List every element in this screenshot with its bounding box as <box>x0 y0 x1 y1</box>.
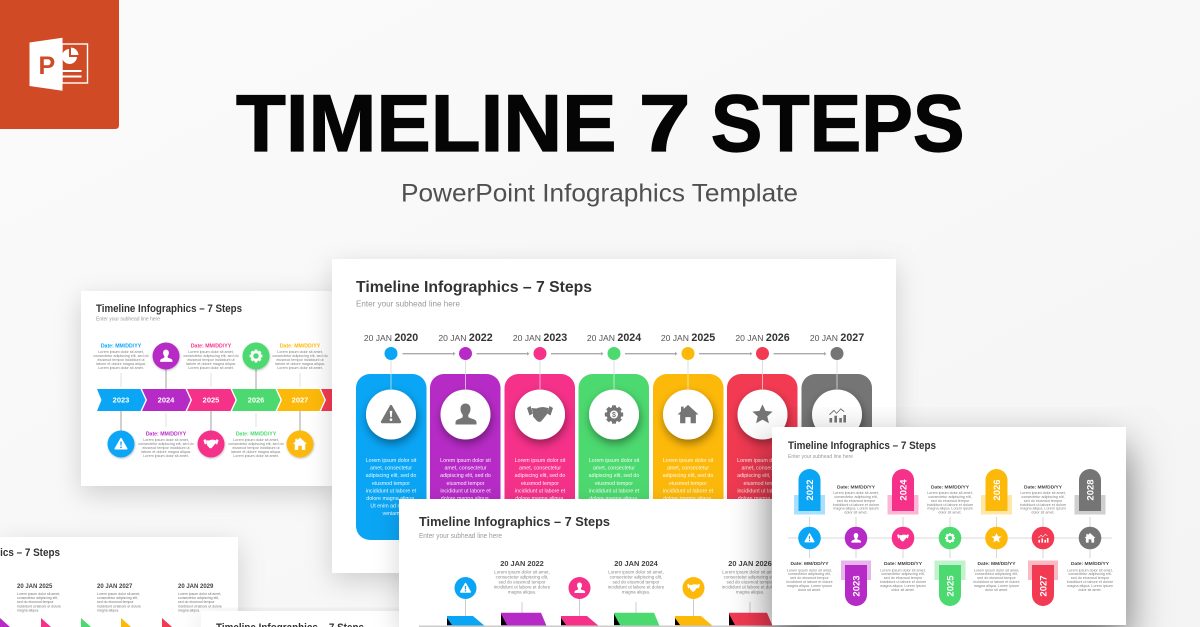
date columns: consectetur adipiscing elit, <box>178 596 219 600</box>
lower date blocks: dolor sit amet. <box>985 588 1008 592</box>
date text blocks: incididunt ut labore et dolore <box>608 584 665 590</box>
connector lines <box>121 373 300 427</box>
card text: dolore magna aliqua. <box>738 496 787 502</box>
white icon circles <box>366 390 862 440</box>
date labels: 20 JAN 2026 <box>735 332 790 344</box>
card text: dolore magna aliqua. <box>515 496 565 502</box>
lower date blocks: magna aliqua. Lorem ipsum <box>880 584 926 588</box>
date text blocks: magna aliqua. <box>736 590 764 594</box>
year tabs <box>798 469 1101 606</box>
timeline axis <box>788 517 1112 558</box>
lower date blocks: consectetur adipiscing elit, <box>1068 572 1112 576</box>
icon: PowerPoint logo <box>0 0 119 129</box>
card text: Lorem ipsum dolor sit <box>366 458 417 464</box>
date text blocks: 20 JAN 2022 <box>500 559 544 568</box>
lower date blocks: sed do eiusmod tempor <box>884 576 923 580</box>
heading: tab slide: Timeline Infographics – 7 Steps <box>788 440 936 452</box>
date columns: magna aliqua. <box>178 608 200 612</box>
upper date blocks: sed do eiusmod tempor <box>837 499 876 503</box>
card text: amet, consectetur <box>370 466 412 472</box>
card text <box>366 458 788 517</box>
upper date blocks: sed do eiusmod tempor <box>931 499 970 503</box>
upper date blocks: dolor sit amet. <box>844 511 868 515</box>
lower date blocks <box>786 561 1113 592</box>
date labels: 20 JAN 2023 <box>513 332 567 344</box>
panel: chevron timeline slide <box>81 291 341 486</box>
lower date blocks: consectetur adipiscing elit, <box>788 572 831 576</box>
upper date blocks: incididunt ut labore et dolore <box>927 503 973 507</box>
date text blocks: sed do eiusmod tempor <box>726 580 774 584</box>
card text: incididunt ut labore et <box>663 488 714 494</box>
date text blocks: consectetur adipiscing elit, <box>610 574 662 580</box>
card text: incididunt ut labore et <box>737 488 788 494</box>
round icons <box>454 577 704 599</box>
upper text blocks: labore et dolore magna aliqua. <box>186 362 236 366</box>
upper date blocks: dolor sit amet. <box>938 511 962 515</box>
lower text blocks: labore et dolore magna aliqua. <box>141 450 191 454</box>
lower text blocks <box>138 432 284 458</box>
date text blocks: Lorem ipsum dolor sit amet, <box>494 570 550 574</box>
card text: eiusmod tempor <box>744 481 782 487</box>
upper text blocks: Date: MM/DD/YY <box>280 344 321 350</box>
date columns: magna aliqua. <box>17 608 39 612</box>
heading: main slide: Timeline Infographics – 7 Steps <box>356 279 592 296</box>
card text: veniam <box>382 511 400 517</box>
upper date blocks: dolor sit amet. <box>1031 511 1055 515</box>
upper text blocks: eiusmod tempor incididunt ut <box>187 358 235 362</box>
date columns: sed do eiusmod tempor <box>97 600 134 604</box>
timeline dots <box>384 347 844 360</box>
lower date blocks: consectetur adipiscing elit, <box>881 572 925 576</box>
card text: dolore magna aliqua. <box>441 496 490 502</box>
upper text blocks: Lorem ipsum dolor sit amet. <box>277 366 323 370</box>
chevron row: 2027 <box>292 396 308 405</box>
card text: Lorem ipsum dolor sit <box>515 458 566 464</box>
subtitle: PowerPoint Infographics Template <box>401 180 798 208</box>
upper date blocks: magna aliqua. Lorem ipsum <box>927 507 973 511</box>
date labels <box>364 332 864 344</box>
card text: amet, consectetur <box>741 466 784 472</box>
date text blocks: sed do eiusmod tempor <box>612 580 660 584</box>
connector lines to circles <box>391 360 837 389</box>
date text blocks: sed do eiusmod tempor <box>498 580 546 584</box>
lower date blocks: Lorem ipsum dolor sit amet, <box>787 568 832 572</box>
upper date blocks: consectetur adipiscing elit, <box>928 495 972 499</box>
subheading: main slide: Enter your subhead line here <box>356 298 460 308</box>
card text: eiusmod tempor <box>447 481 485 487</box>
date columns: sed do eiusmod tempor <box>178 600 215 604</box>
upper text blocks: Lorem ipsum dolor sit amet, <box>188 350 234 354</box>
date columns <box>17 584 222 612</box>
lower date blocks: Date: MM/DD/YY <box>790 561 829 567</box>
lower date blocks: Lorem ipsum dolor sit amet, <box>1067 568 1113 572</box>
card text: dolore magna aliqua. <box>366 496 416 502</box>
card text: eiusmod tempor <box>521 481 559 487</box>
upper text blocks: Lorem ipsum dolor sit amet. <box>188 366 234 370</box>
date text blocks <box>494 559 779 594</box>
year tabs: 2027 <box>1038 575 1049 597</box>
upper text blocks: Date: MM/DD/YY <box>191 344 232 350</box>
upper date blocks: incididunt ut labore et dolore <box>833 503 879 507</box>
card text: amet, consectetur <box>667 466 709 472</box>
card text: incididunt ut labore et <box>515 488 566 494</box>
date text blocks: Lorem ipsum dolor sit amet, <box>722 570 778 574</box>
lower text blocks: eiusmod tempor incididunt ut <box>142 446 190 450</box>
lower date blocks: dolor sit amet. <box>1078 588 1102 592</box>
lower date blocks: Lorem ipsum dolor sit amet, <box>880 568 926 572</box>
upper text blocks: Lorem ipsum dolor sit amet, <box>277 350 323 354</box>
base line <box>419 626 819 627</box>
date columns: consectetur adipiscing elit, <box>97 596 138 600</box>
lower date blocks: dolor sit amet. <box>891 588 915 592</box>
upper date blocks: Lorem ipsum dolor sit amet, <box>833 491 879 495</box>
chevron row: 2026 <box>248 396 264 405</box>
card icons: $ <box>612 412 616 419</box>
date columns: Lorem ipsum dolor sit amet, <box>178 592 221 596</box>
date columns: Lorem ipsum dolor sit amet, <box>17 592 60 596</box>
heading: chevron slide: Timeline Infographics – 7 Steps <box>96 303 242 315</box>
upper date blocks <box>833 484 1066 515</box>
card text: amet, consectetur <box>519 466 561 472</box>
lower date blocks: incididunt ut labore et dolore <box>786 580 833 584</box>
date text blocks: Lorem ipsum dolor sit amet, <box>608 570 664 574</box>
step icons <box>115 350 307 450</box>
upper text blocks: consectetur adipiscing elit, sed do <box>183 354 239 358</box>
lower text blocks: consectetur adipiscing elit, sed do <box>228 442 284 446</box>
title: TIMELINE <box>236 78 617 169</box>
card icons <box>381 404 846 424</box>
folded ribbons <box>447 613 773 627</box>
card text: dolore magna aliqua. <box>663 496 713 502</box>
date text blocks: consectetur adipiscing elit, <box>496 574 548 580</box>
chevron row: 2023 <box>113 396 129 405</box>
date columns: incididunt ut labore et dolore <box>17 604 61 608</box>
card text: incididunt ut labore et <box>589 488 640 494</box>
card text: Lorem ipsum dolor sit <box>589 458 640 464</box>
coloured cards <box>356 374 872 540</box>
card text: adipiscing elit, sed do <box>515 473 565 479</box>
upper date blocks: consectetur adipiscing elit, <box>834 495 878 499</box>
chevron row <box>97 389 340 411</box>
date labels: 20 JAN 2022 <box>438 332 493 344</box>
date columns: 20 JAN 2027 <box>97 584 133 590</box>
upper text blocks: Date: MM/DD/YY <box>101 344 142 350</box>
upper text blocks: consectetur adipiscing elit, sed do <box>272 354 328 358</box>
subheading: ribbon slide: Enter your subhead line here <box>419 533 502 540</box>
lower date blocks: Date: MM/DD/YY <box>977 561 1016 567</box>
date text blocks: consectetur adipiscing elit, <box>724 574 776 580</box>
year tabs: 2028 <box>1085 479 1096 501</box>
lower date blocks: sed do eiusmod tempor <box>1071 576 1110 580</box>
lower text blocks: eiusmod tempor incididunt ut <box>232 446 280 450</box>
upper text blocks: labore et dolore magna aliqua. <box>275 362 325 366</box>
connector stems <box>121 369 300 432</box>
lower date blocks: magna aliqua. Lorem ipsum <box>787 584 832 588</box>
card text: amet, consectetur <box>593 466 635 472</box>
upper date blocks: sed do eiusmod tempor <box>1024 499 1063 503</box>
year tabs: 2022 <box>805 479 816 501</box>
panel: ribbon timeline slide <box>399 499 819 627</box>
upper text blocks: consectetur adipiscing elit, sed do <box>93 354 149 358</box>
upper text blocks <box>93 344 328 370</box>
card text: incididunt ut labore et <box>440 488 491 494</box>
lower date blocks: magna aliqua. Lorem ipsum <box>1067 584 1113 588</box>
lower date blocks: Lorem ipsum dolor sit amet, <box>974 568 1019 572</box>
date labels: 20 JAN 2024 <box>587 332 641 344</box>
date columns: incididunt ut labore et dolore <box>178 604 222 608</box>
lower date blocks: incididunt ut labore et dolore <box>1067 580 1113 584</box>
card text: eiusmod tempor <box>372 481 410 487</box>
card text: Lorem ipsum dolor sit <box>663 458 714 464</box>
icon: PowerPoint logo: P <box>38 52 55 80</box>
pale tab backgrounds <box>794 495 1106 580</box>
upper date blocks: Date: MM/DD/YY <box>931 484 970 490</box>
subheading: chevron slide: Enter your subhead line here <box>96 316 160 322</box>
date text blocks: magna aliqua. <box>508 590 536 594</box>
lower text blocks: Lorem ipsum dolor sit amet, <box>233 438 279 442</box>
panel: vertical tab timeline slide <box>772 427 1126 625</box>
upper text blocks: Lorem ipsum dolor sit amet, <box>98 350 144 354</box>
lower text blocks: labore et dolore magna aliqua. <box>231 450 281 454</box>
date text blocks: 20 JAN 2026 <box>728 559 772 568</box>
date text blocks: magna aliqua. <box>622 590 650 594</box>
title <box>236 77 965 169</box>
lower date blocks: Date: MM/DD/YY <box>884 561 923 567</box>
upper text blocks: Lorem ipsum dolor sit amet. <box>98 366 144 370</box>
card text: adipiscing elit, sed do <box>663 473 713 479</box>
lower text blocks: Date: MM/DD/YY <box>236 432 277 438</box>
card text: adipiscing elit, sed do <box>589 473 639 479</box>
title: STEPS <box>711 77 965 168</box>
date columns: 20 JAN 2029 <box>178 584 214 590</box>
year tabs: 2023 <box>851 575 862 597</box>
panel: partial slide bottom left <box>0 537 238 627</box>
upper date blocks: magna aliqua. Lorem ipsum <box>1020 507 1066 511</box>
lower date blocks: dolor sit amet. <box>798 588 821 592</box>
heading: ribbon slide: Timeline Infographics – 7 Steps <box>419 514 610 529</box>
year tabs: 2024 <box>898 479 909 501</box>
upper date blocks: Date: MM/DD/YY <box>837 484 876 490</box>
lower text blocks: Lorem ipsum dolor sit amet. <box>143 454 189 458</box>
lower date blocks: Date: MM/DD/YY <box>1071 561 1110 567</box>
coloured ribbon tips <box>0 618 172 627</box>
lower date blocks: sed do eiusmod tempor <box>977 576 1017 580</box>
card text: adipiscing elit, sed do <box>440 473 491 479</box>
title: 7 <box>639 78 691 168</box>
panel: main card timeline slide <box>332 259 896 573</box>
lower date blocks: incididunt ut labore et dolore <box>973 580 1020 584</box>
lower text blocks: consectetur adipiscing elit, sed do <box>138 442 194 446</box>
card text: adipiscing elit, sed do <box>737 473 788 479</box>
card text: amet, consectetur <box>444 466 487 472</box>
card text: eiusmod tempor <box>595 481 633 487</box>
card text: incididunt ut labore et <box>366 488 417 494</box>
lower date blocks: incididunt ut labore et dolore <box>880 580 926 584</box>
year tabs: 2025 <box>945 575 956 597</box>
date text blocks: incididunt ut labore et dolore <box>494 584 551 590</box>
card text: adipiscing elit, sed do <box>366 473 416 479</box>
card text: Lorem ipsum dolor sit <box>440 458 491 464</box>
card text: eiusmod tempor <box>669 481 707 487</box>
date labels: 20 JAN 2027 <box>810 332 864 344</box>
year tabs: 2026 <box>992 479 1003 501</box>
date columns: 20 JAN 2025 <box>17 584 53 590</box>
date text blocks: 20 JAN 2024 <box>614 559 659 568</box>
chevron row: 2025 <box>203 396 219 405</box>
chevron row: 2024 <box>158 396 175 405</box>
card text: dolore magna aliqua. <box>589 496 639 502</box>
upper date blocks: Lorem ipsum dolor sit amet, <box>927 491 973 495</box>
lower date blocks: consectetur adipiscing elit, <box>975 572 1018 576</box>
date columns: consectetur adipiscing elit, <box>17 596 58 600</box>
date columns: sed do eiusmod tempor <box>17 600 54 604</box>
upper date blocks: Lorem ipsum dolor sit amet, <box>1020 491 1066 495</box>
subheading: tab slide: Enter your subhead line here <box>788 454 853 460</box>
connector lines <box>466 595 750 617</box>
date columns: incididunt ut labore et dolore <box>97 604 141 608</box>
upper date blocks: Date: MM/DD/YY <box>1024 484 1063 490</box>
card text: Ut enim ad minim <box>370 504 412 510</box>
step circles <box>108 342 314 458</box>
upper date blocks: incididunt ut labore et dolore <box>1020 503 1066 507</box>
lower date blocks: magna aliqua. Lorem ipsum <box>974 584 1019 588</box>
date columns: magna aliqua. <box>97 608 119 612</box>
upper date blocks: consectetur adipiscing elit, <box>1021 495 1065 499</box>
date columns: Lorem ipsum dolor sit amet, <box>97 592 140 596</box>
arrows between dots <box>402 352 826 356</box>
upper date blocks: magna aliqua. Lorem ipsum <box>833 507 879 511</box>
axis icons <box>804 533 1096 543</box>
panel: partial slide bottom centre-left <box>201 611 431 627</box>
lower text blocks: Lorem ipsum dolor sit amet. <box>233 454 279 458</box>
lower text blocks: Lorem ipsum dolor sit amet, <box>143 438 189 442</box>
date labels: 20 JAN 2020 <box>364 332 418 344</box>
upper text blocks: labore et dolore magna aliqua. <box>96 362 146 366</box>
lower text blocks: Date: MM/DD/YY <box>146 432 187 438</box>
date labels: 20 JAN 2025 <box>661 332 715 344</box>
date text blocks: incididunt ut labore et dolore <box>722 584 779 590</box>
upper text blocks: eiusmod tempor incididunt ut <box>97 358 145 362</box>
lower date blocks: sed do eiusmod tempor <box>790 576 830 580</box>
card text: Lorem ipsum dolor sit <box>737 458 788 464</box>
upper text blocks: eiusmod tempor incididunt ut <box>276 358 324 362</box>
axis circles <box>798 527 1101 549</box>
